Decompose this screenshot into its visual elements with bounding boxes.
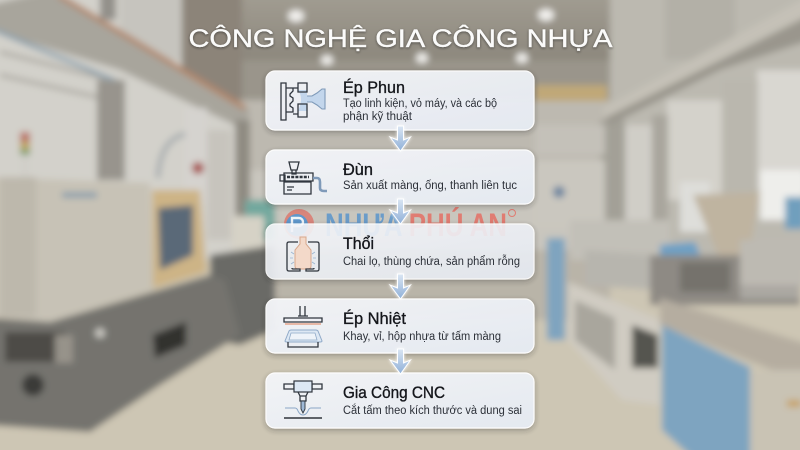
description: Khay, vỉ, hộp nhựa từ tấm màng (343, 331, 501, 343)
icon: blow mold (287, 237, 319, 271)
card: Ép Nhiệt (266, 299, 534, 353)
logo watermark (284, 207, 516, 243)
description: Chai lọ, thùng chứa, sản phẩm rỗng (343, 255, 520, 268)
description: Sản xuất màng, ống, thanh liên tục (343, 180, 517, 192)
logo mark (284, 209, 314, 239)
arrow: Thổi to Ép Nhiệt (390, 274, 410, 299)
card: Đùn (266, 150, 534, 204)
description: Tạo linh kiện, vỏ máy, và các bộ (343, 98, 497, 110)
logo wordmark: NHỰA PHÚ AN (325, 207, 507, 243)
arrow: Đùn to Thổi (390, 199, 410, 224)
title: CÔNG NGHỆ GIA CÔNG NHỰA (188, 24, 613, 53)
icon: extruder (280, 162, 327, 194)
description: Cắt tấm theo kích thước và dung sai (343, 404, 522, 417)
heading: Thổi (343, 234, 374, 253)
icon: CNC cutter (284, 381, 322, 418)
card: Ép Phun (266, 71, 534, 130)
arrow: Ép Phun to Đùn (390, 126, 410, 151)
heading: Đùn (343, 160, 373, 179)
card: Thổi (266, 224, 534, 279)
heading: Ép Nhiệt (343, 309, 406, 328)
heading: Ép Phun (343, 78, 405, 97)
arrow: Ép Nhiệt to Gia Công CNC (390, 349, 410, 374)
icon: thermoforming (284, 306, 322, 347)
description: phận kỹ thuật (343, 111, 413, 123)
icon: injection mold (281, 83, 325, 120)
card: Gia Công CNC (266, 373, 534, 428)
heading: Gia Công CNC (343, 383, 445, 402)
